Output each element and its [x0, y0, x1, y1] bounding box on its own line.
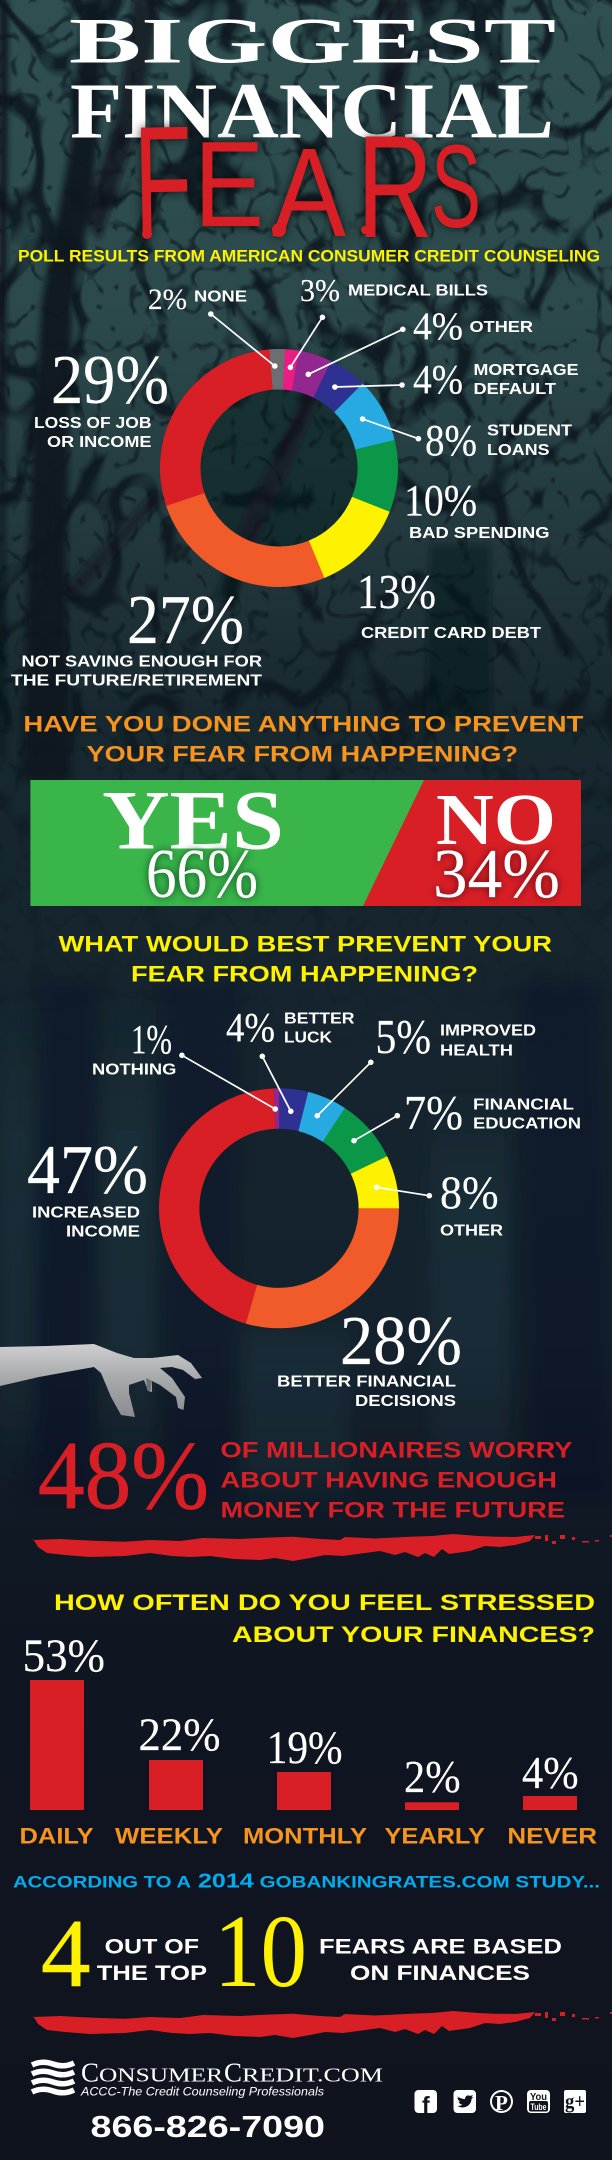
source line: 2014 [198, 1870, 254, 1893]
label: 4% better luck: LUCK [284, 1030, 332, 1047]
label: 7% financial education: FINANCIAL [473, 1096, 574, 1113]
label: 8% other: 8% [440, 1167, 498, 1219]
label: 4% better luck [226, 1004, 355, 1050]
donut chart: biggest fears [139, 328, 419, 608]
label: 47% increased income: INCREASED [32, 1204, 140, 1221]
callout text: OF MILLIONAIRES WORRY [220, 1438, 573, 1463]
label: 8% student loans: STUDENT [487, 422, 572, 440]
title [69, 6, 556, 270]
big yellow 10: 10 [214, 1894, 307, 2009]
title line: Fears: F [133, 93, 194, 270]
label: 3% medical bills [300, 272, 488, 308]
panel: yes no bar [30, 774, 581, 913]
label: 4% better luck: BETTER [284, 1010, 355, 1027]
label: 27% not saving: 27% [127, 582, 244, 659]
bar: yearly [384, 1751, 485, 1848]
subtitle: POLL RESULTS FROM AMERICAN CONSUMER CREDIT COUNSELING [18, 246, 600, 266]
source line: ACCORDING TO A [13, 1873, 191, 1892]
label: 1% nothing [92, 1016, 176, 1078]
label: 4% other [413, 305, 534, 348]
label: 1% nothing: 1% [131, 1016, 172, 1062]
logo wordmark: C [224, 2058, 242, 2088]
label: 4% other: OTHER [470, 319, 534, 336]
label: 13% credit card debt [357, 564, 541, 642]
title line: Fears [133, 93, 481, 270]
label: 1% nothing: NOTHING [92, 1062, 176, 1078]
logo: ConsumerCredit.com [32, 2058, 383, 2098]
title line: Financial: FINANCIAL [70, 68, 554, 156]
heading: have you done anything: YOUR FEAR FROM HAPPENING? [87, 742, 518, 767]
yes label: YES [102, 774, 284, 868]
bar: yearly: YEARLY [384, 1824, 485, 1848]
callout number: 48% [38, 1422, 209, 1530]
bar: never: NEVER [507, 1824, 597, 1848]
icon: pinterest: P [495, 2091, 508, 2115]
label: 47% increased income: INCOME [66, 1224, 140, 1241]
label: 7% financial education: 7% [404, 1085, 463, 1140]
bar: never [507, 1747, 597, 1848]
fears are based on finances: ON FINANCES [350, 1962, 530, 1985]
phone number: 866-826-7090 [90, 2110, 325, 2144]
fears are based on finances: FEARS ARE BASED [319, 1935, 562, 1958]
label: 4% mortgage default: DEFAULT [474, 381, 556, 398]
icon: twitter [454, 2090, 476, 2113]
brush stroke divider [31, 1534, 612, 1561]
bar: daily: DAILY [20, 1824, 94, 1848]
icon: youtube [527, 2090, 550, 2113]
label: 5% improved health: IMPROVED [440, 1023, 536, 1040]
title line: Fears: E [194, 116, 264, 252]
background: dark forest [0, 0, 612, 1506]
label: 5% improved health: 5% [376, 1009, 431, 1064]
leader lines: first donut [208, 311, 421, 442]
labels: first donut [11, 272, 579, 690]
bar: daily: 53% [23, 1630, 105, 1682]
no label: NO [436, 779, 556, 860]
label: 3% medical bills: 3% [300, 272, 340, 308]
label: 4% other: 4% [413, 305, 463, 348]
label: 8% student loans: LOANS [487, 442, 550, 459]
label: 27% not saving: THE FUTURE/RETIREMENT [11, 673, 262, 690]
label: 7% financial education: EDUCATION [473, 1115, 581, 1132]
label: 2% none [148, 283, 247, 316]
icon: youtube: Tube [530, 2102, 546, 2113]
label: 47% increased income [27, 1132, 148, 1241]
label: 29% loss of job: LOSS OF JOB [34, 415, 152, 432]
label: 2% none: NONE [194, 289, 247, 306]
label: 4% mortgage default: 4% [413, 356, 463, 402]
label: 4% mortgage default [413, 356, 579, 402]
callout: 4 out of top 10 [41, 1894, 562, 2009]
icon: logo waves [32, 2062, 74, 2093]
label: 7% financial education [404, 1085, 581, 1140]
heading: what would best prevent: WHAT WOULD BEST PREVENT YOUR [58, 932, 552, 957]
callout text: MONEY FOR THE FUTURE [220, 1498, 565, 1523]
icon: reaching hand [0, 1344, 202, 1417]
label: 8% other: OTHER [440, 1223, 504, 1240]
heading: what would best prevent: FEAR FROM HAPPENING? [131, 962, 478, 987]
callout: 48% of millionaires [38, 1422, 573, 1530]
bar: weekly [115, 1709, 223, 1848]
social icons [414, 2089, 586, 2118]
logo wordmark [81, 2058, 383, 2088]
logo tagline: ACCC-The Credit Counseling Professionals [80, 2086, 324, 2098]
bar: weekly: WEEKLY [115, 1824, 223, 1848]
brush stroke divider [31, 2011, 612, 2038]
label: 8% student loans [425, 416, 572, 465]
label: 27% not saving: NOT SAVING ENOUGH FOR [22, 654, 263, 671]
leader lines: second donut [179, 1052, 432, 1198]
label: 28% better decisions: BETTER FINANCIAL [277, 1374, 456, 1391]
title line: Biggest: BIGGEST [69, 6, 556, 78]
label: 10% bad spending [404, 476, 550, 542]
label: 8% student loans: 8% [425, 416, 477, 465]
callout text [220, 1438, 573, 1523]
icon: facebook: f [422, 2092, 430, 2118]
heading: how often stressed [54, 1590, 595, 1647]
heading: how often stressed: ABOUT YOUR FINANCES? [232, 1622, 595, 1647]
label: 27% not saving [11, 582, 263, 690]
out of the top [97, 1935, 207, 1985]
label: 29% loss of job: OR INCOME [47, 434, 152, 451]
66 percent: 66% [146, 836, 258, 913]
heading: what would best prevent [58, 932, 552, 987]
title line: Fears: A [272, 122, 346, 263]
title line: Fears: S [431, 121, 481, 253]
source line: GOBANKINGRATES.COM STUDY... [260, 1873, 600, 1892]
label: 10% bad spending: 10% [404, 476, 477, 525]
label: 5% improved health: HEALTH [440, 1043, 513, 1060]
logo wordmark: ONSUMER [99, 2064, 223, 2086]
label: 29% loss of job [34, 342, 169, 451]
callout text: ABOUT HAVING ENOUGH [220, 1468, 557, 1493]
logo wordmark: REDIT.COM [242, 2064, 383, 2086]
label: 3% medical bills: MEDICAL BILLS [348, 283, 488, 300]
34 percent: 34% [433, 836, 560, 913]
label: 5% improved health [376, 1009, 536, 1064]
bar: daily [20, 1630, 105, 1848]
label: 13% credit card debt: CREDIT CARD DEBT [361, 625, 541, 642]
label: 28% better decisions: DECISIONS [355, 1393, 456, 1410]
label: 4% mortgage default: MORTGAGE [474, 362, 579, 379]
bar: never: 4% [522, 1747, 578, 1798]
icon: facebook [414, 2090, 437, 2118]
label: 4% better luck: 4% [226, 1004, 275, 1050]
label: 29% loss of job: 29% [51, 342, 169, 419]
bar: monthly: 19% [267, 1722, 343, 1774]
heading: how often stressed: HOW OFTEN DO YOU FEEL STRESSED [54, 1590, 595, 1615]
label: 10% bad spending: BAD SPENDING [409, 525, 550, 542]
label: 13% credit card debt: 13% [357, 564, 436, 619]
fears are based on finances [319, 1935, 562, 1985]
label: 2% none: 2% [148, 283, 187, 316]
labels: second donut [27, 1004, 581, 1410]
icon: pinterest [490, 2090, 513, 2115]
bar: weekly: 22% [138, 1709, 220, 1761]
heading: have you done anything: HAVE YOU DONE ANYTHING TO PREVENT [23, 712, 584, 737]
bar chart: stress frequency [20, 1630, 597, 1848]
icon: google plus: g+ [565, 2089, 585, 2113]
label: 47% increased income: 47% [27, 1132, 148, 1209]
donut chart: best prevention [141, 1070, 417, 1347]
bar: yearly: 2% [404, 1751, 460, 1802]
out of the top: THE TOP [97, 1962, 207, 1985]
label: 28% better decisions [277, 1303, 462, 1410]
label: 28% better decisions: 28% [340, 1303, 462, 1380]
bar: monthly: MONTHLY [243, 1824, 367, 1848]
logo wordmark: C [81, 2058, 99, 2088]
title line: Fears: R [357, 105, 433, 268]
source line [13, 1870, 600, 1893]
heading: have you done anything [23, 712, 584, 767]
bar: monthly [243, 1722, 367, 1848]
big yellow 4: 4 [41, 1900, 90, 2008]
icon: youtube: You [530, 2092, 547, 2103]
out of the top: OUT OF [105, 1935, 199, 1958]
